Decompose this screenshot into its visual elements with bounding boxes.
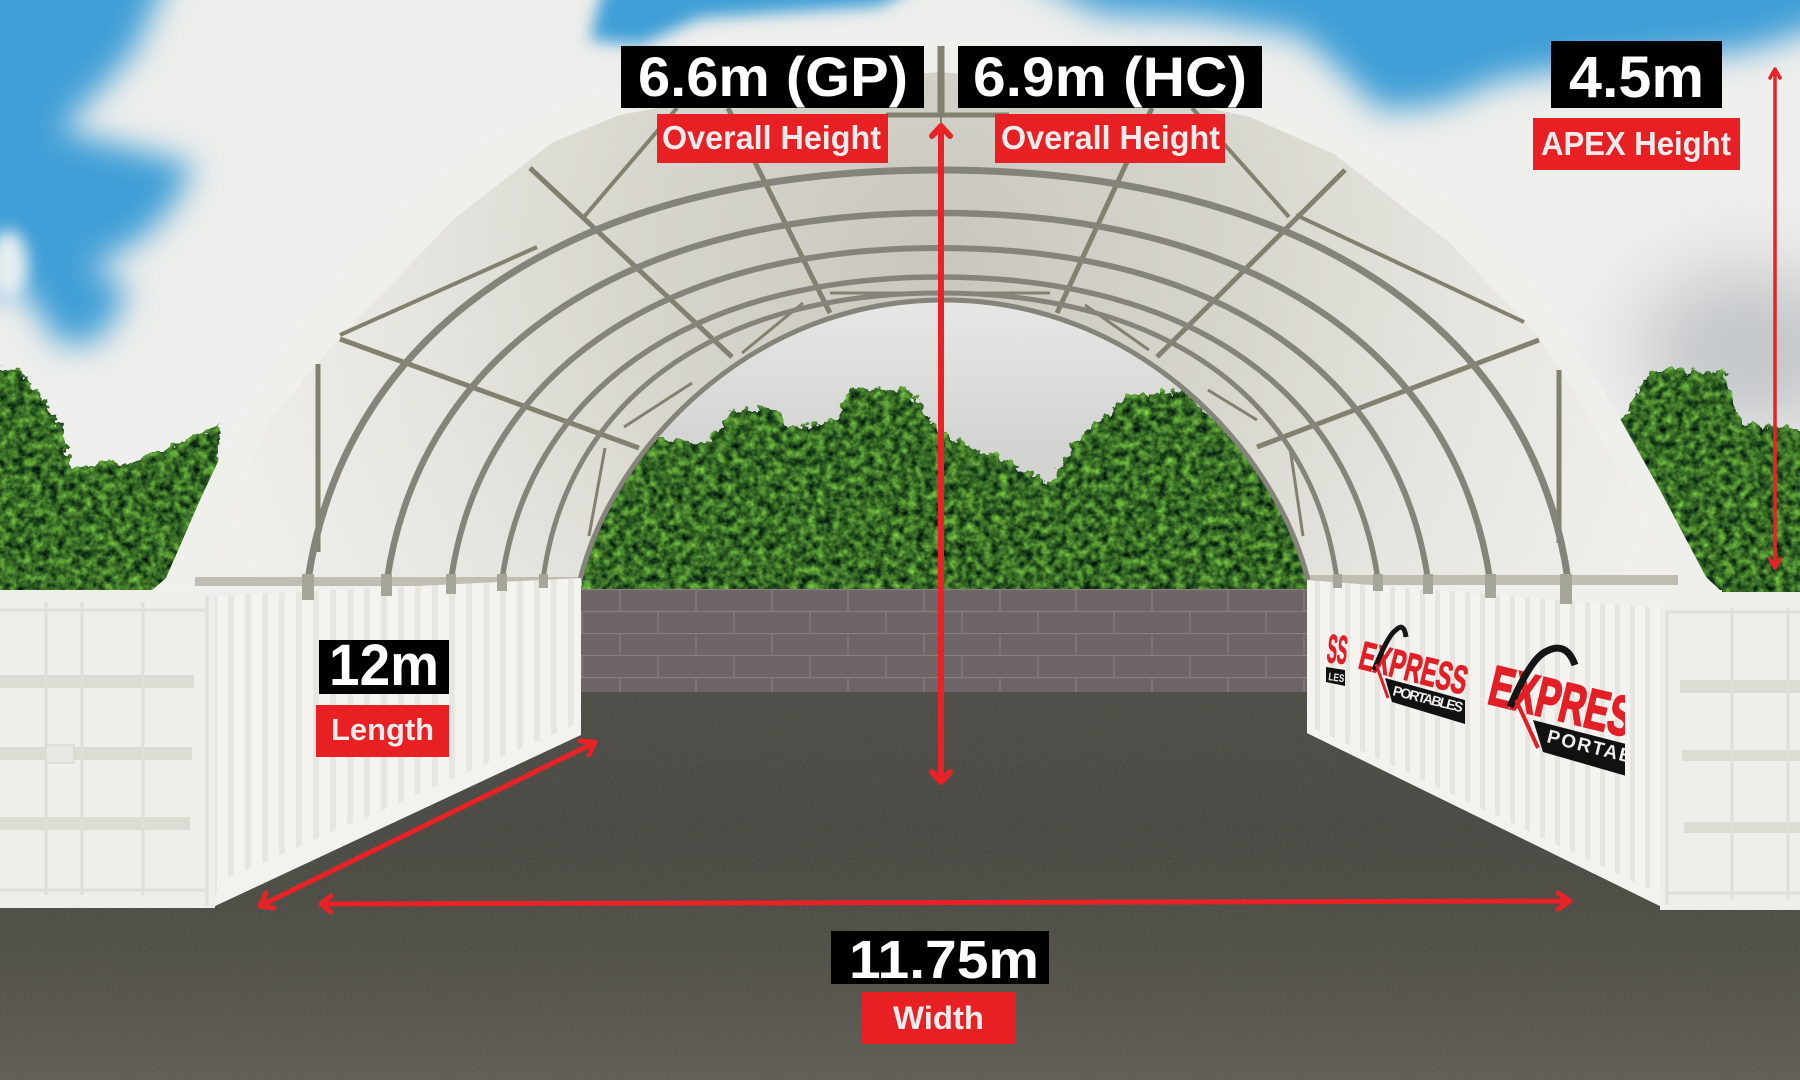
caption: length: Length	[331, 712, 434, 747]
infographic: container dome shelter dimensions: SS	[1325, 627, 1350, 673]
left container bottom rail	[213, 722, 581, 907]
asphalt ground	[0, 692, 1800, 1080]
dome base shadow band	[195, 575, 1678, 586]
logo: Express Portables, second (clipped): EXPRESS	[1483, 653, 1663, 754]
left container	[0, 578, 581, 908]
sky with clouds	[0, 0, 1800, 600]
value: 12m: 12m	[329, 633, 439, 698]
caption: width	[862, 992, 1016, 1044]
trees: left	[0, 367, 221, 600]
blue sky patch: top right	[1000, 0, 1800, 110]
grey cloud: right	[1640, 270, 1800, 430]
arrow: apex height	[1770, 69, 1780, 568]
caption: overall height: Overall Height	[662, 119, 881, 156]
caption: apex height	[1533, 118, 1740, 170]
value: 11.75m: 11.75m	[849, 930, 1039, 990]
trees: right	[1620, 369, 1800, 600]
left container end doors	[0, 590, 215, 908]
dome purlins and braces	[318, 46, 1559, 552]
label: 12m length	[316, 633, 449, 757]
arrow: width	[321, 893, 1570, 912]
label: 4.5m apex height	[1533, 41, 1740, 170]
logo fragment: partly cut Express Portables logo: LES	[1328, 671, 1345, 685]
caption: apex height: APEX Height	[1541, 125, 1731, 162]
logo: Express Portables, second (clipped)	[1488, 644, 1625, 776]
rib foot brackets	[302, 574, 1572, 604]
label: 6.6m (GP) overall height	[621, 45, 924, 163]
light wisp: left	[0, 230, 28, 300]
block wall at the far end	[560, 589, 1330, 693]
label: 6.9m (HC) overall height	[958, 45, 1262, 163]
dome ribs	[308, 170, 1568, 580]
right container bottom rail	[1307, 725, 1662, 907]
dome outer shell	[150, 40, 1722, 592]
blue sky patch: top centre	[590, 0, 960, 45]
value: 4.5m: 4.5m	[1569, 45, 1704, 110]
logo: Express Portables, first: EXPRESS	[1355, 634, 1472, 703]
right container	[1307, 580, 1800, 910]
label: 11.75m width	[831, 930, 1049, 1044]
arrow: length	[260, 741, 595, 908]
arrows	[260, 69, 1780, 912]
value: 6.9m (HC): 6.9m (HC)	[973, 45, 1247, 108]
dome shelter	[150, 40, 1722, 620]
arrow: overall height	[932, 126, 950, 782]
logo fragment: partly cut Express Portables logo	[1326, 634, 1348, 686]
logo: Express Portables, second (clipped): PORTABLES	[1545, 726, 1676, 778]
caption: overall height: Overall Height	[1001, 119, 1220, 156]
right container side wall	[1307, 580, 1662, 907]
dome side fill behind right container	[1307, 590, 1722, 620]
caption: width: Width	[893, 1000, 984, 1036]
sky through back opening	[560, 280, 1330, 600]
value: 6.6m (GP): 6.6m (GP)	[638, 45, 908, 108]
blue sky patch: upper left	[0, 0, 195, 345]
dome fabric underside	[205, 72, 1676, 580]
trees: centre	[560, 388, 1330, 600]
logo: Express Portables, first	[1355, 627, 1472, 724]
left container side wall	[213, 578, 581, 905]
logo: Express Portables, first: PORTABLES	[1391, 682, 1465, 715]
right container end doors	[1660, 592, 1800, 910]
tree line behind the shelter	[0, 367, 1800, 600]
